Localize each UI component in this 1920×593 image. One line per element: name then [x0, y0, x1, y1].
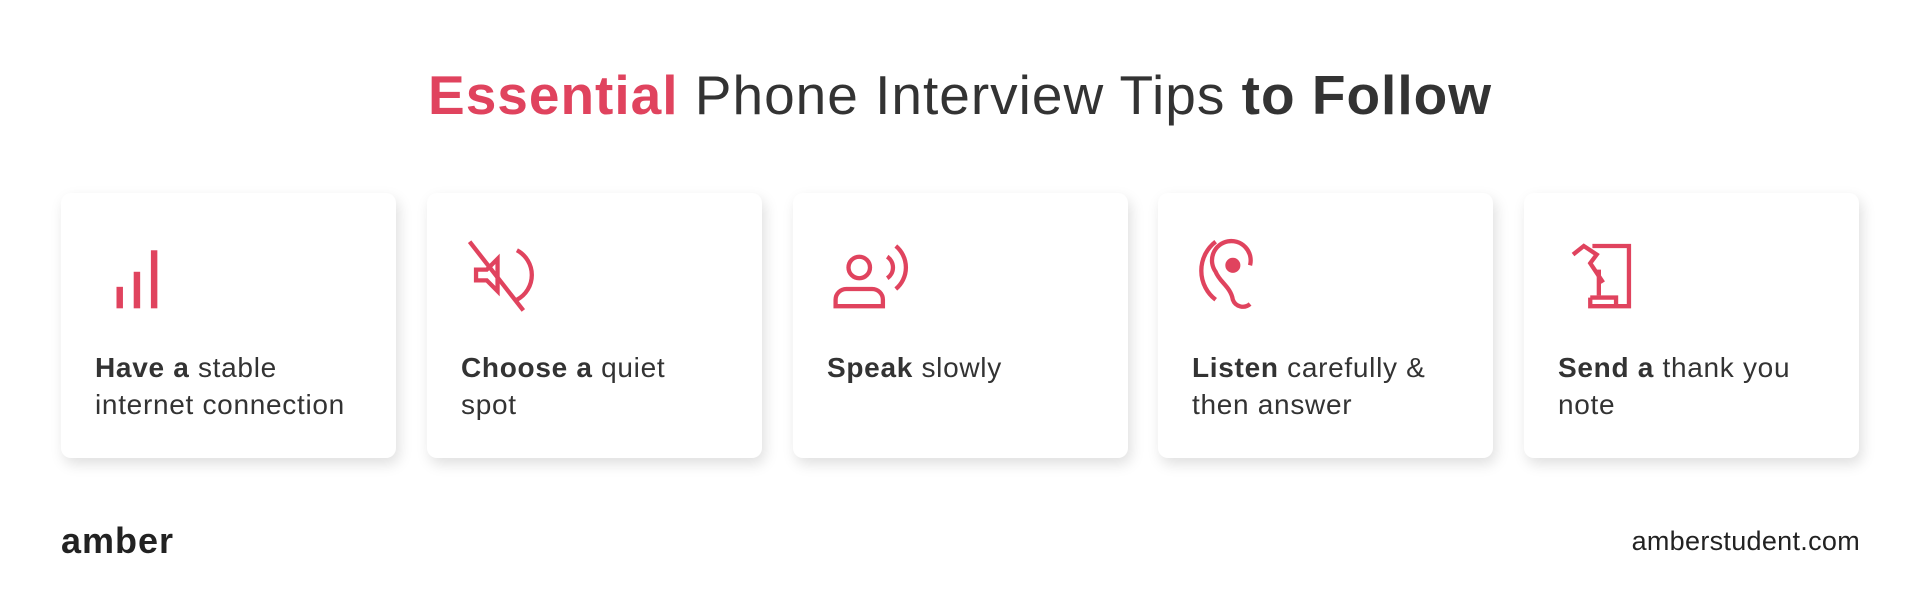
card: quiet spot: [427, 193, 762, 458]
card: listen: [1158, 193, 1493, 458]
card: thank you note: [1524, 193, 1859, 458]
icon: quill note: [1572, 243, 1632, 308]
text: [1192, 352, 1426, 420]
text: [1558, 352, 1790, 420]
website: amberstudent.com: [1632, 526, 1860, 556]
icon: muted speaker: [468, 240, 534, 312]
card: speak slowly: [793, 193, 1128, 458]
text: Have a stable: [95, 352, 277, 383]
icon: signal bars: [116, 250, 158, 308]
text: Choose a quiet: [461, 352, 665, 383]
text: Send a thank you: [1558, 352, 1790, 383]
text: [95, 352, 345, 420]
text: Listen carefully &: [1192, 352, 1426, 383]
text: Speak slowly: [827, 352, 1002, 383]
text: note: [1558, 389, 1615, 420]
text: internet connection: [95, 389, 345, 420]
logo: amber: amber: [61, 520, 174, 561]
icon: ear: [1199, 238, 1253, 309]
title: Essential Phone Interview Tips to Follow: [428, 64, 1492, 126]
text: then answer: [1192, 389, 1352, 420]
text: spot: [461, 389, 517, 420]
text: [461, 352, 665, 420]
card: stable internet: [61, 193, 396, 458]
icon: speaking person: [833, 244, 908, 308]
